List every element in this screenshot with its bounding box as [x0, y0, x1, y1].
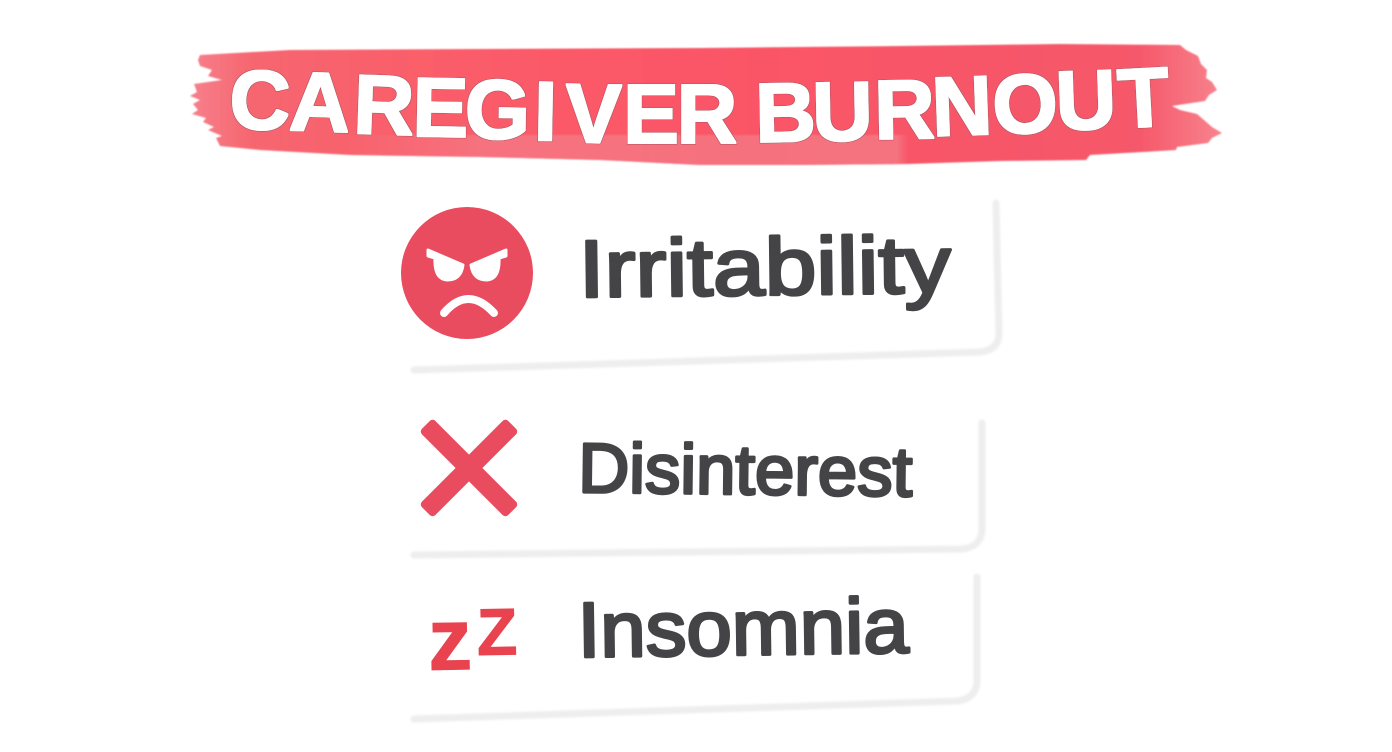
label: irritability: Irritability — [578, 220, 952, 315]
card — [414, 203, 999, 370]
label: disinterest: Disinterest — [578, 429, 913, 511]
icon: sleep zz: Z — [476, 594, 518, 669]
icon: angry face — [401, 207, 533, 339]
card — [414, 423, 982, 555]
card — [414, 577, 977, 719]
icon: sleep zz: z — [427, 589, 473, 689]
brush stroke background — [190, 44, 1222, 165]
label: insomnia: Insomnia — [577, 581, 910, 674]
panel: irritability — [401, 203, 999, 370]
title text: CAREGIVER BURNOUT — [228, 49, 1172, 161]
panel: insomnia — [414, 577, 977, 719]
panel: disinterest — [414, 418, 982, 555]
title banner — [190, 44, 1222, 165]
icon: cross — [419, 418, 519, 518]
